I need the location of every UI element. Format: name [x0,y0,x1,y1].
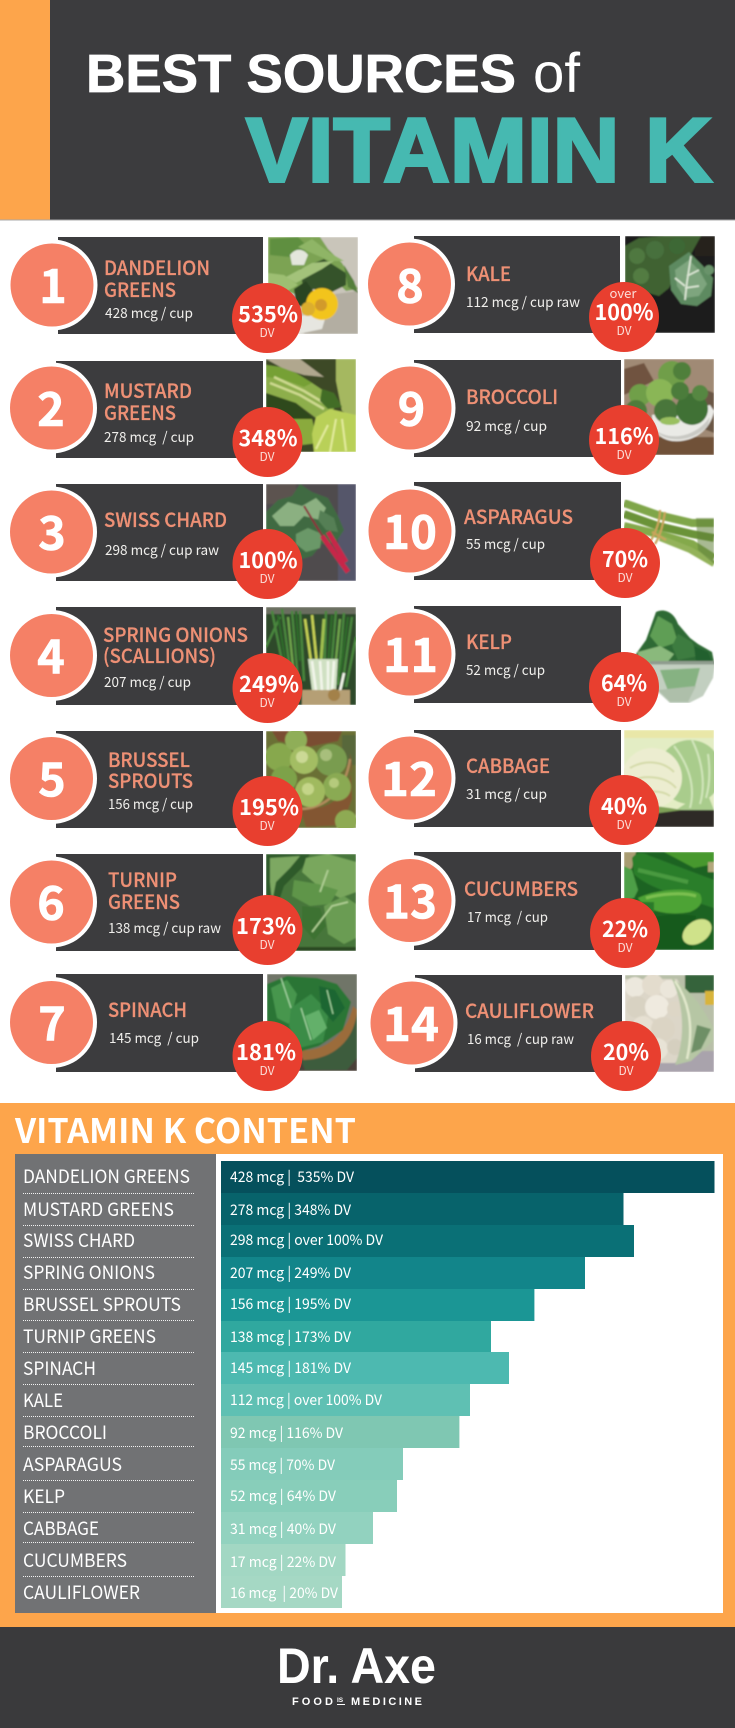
food name and amount: SWISS CHARD [104,504,227,533]
dv badge [589,282,659,352]
dv badge: DV [617,569,633,586]
food label column: ASPARAGUS [23,1451,122,1477]
bar chart: 17 mcg | 22% DV [230,1551,337,1572]
dv badge [589,405,659,475]
photo: cucumbers [624,852,714,950]
photo: spinach [267,974,357,1071]
number 7 [6,977,97,1068]
number 5: 5 [38,742,66,810]
food label column: CABBAGE [23,1515,99,1541]
tagline: MEDICINE [351,1696,422,1708]
dv badge: 348% [238,421,298,453]
number 4: 4 [37,618,65,688]
panel: vitamin k content [0,1103,735,1627]
food name and amount [108,864,221,938]
dv badge: DV [616,693,632,710]
number 1 [6,240,98,330]
food name and amount: 156 mcg / cup [108,794,193,814]
food name and amount: GREENS [104,274,176,303]
food label column: SWISS CHARD [23,1227,135,1253]
dv badge: 100% [594,295,654,327]
photo: asparagus [624,500,714,568]
bar chart: 207 mcg | 249% DV [230,1262,352,1283]
bar chart: 16 mcg | 20% DV [230,1582,339,1603]
dv badge: DV [259,1062,275,1079]
card 6: turnip greens [6,854,356,965]
card 7: spinach [6,974,357,1091]
number 13 [364,855,456,946]
dv badge [232,895,302,965]
food label column: BROCCOLI [23,1419,107,1445]
amount: 92 mcg / cup [466,416,547,436]
photo: swiss chard [266,484,356,581]
dv badge: DV [259,936,275,953]
card 2: mustard greens [6,359,356,477]
card 1: dandelion greens [6,237,358,353]
dv badge: 195% [239,790,299,822]
number 14 [366,978,458,1068]
food name and amount: SPINACH [108,994,187,1023]
card 5: brussel sprouts [6,729,357,846]
food name and amount [103,619,248,692]
card 4: spring onions [6,607,356,723]
bar chart: 92 mcg | 116% DV [230,1422,344,1443]
dv badge: 249% [239,667,299,699]
food name: CUCUMBERS [464,873,578,902]
bar chart: 278 mcg | 348% DV [230,1199,352,1220]
food label column: TURNIP GREENS [23,1323,156,1349]
food label column: BRUSSEL SPROUTS [23,1291,181,1317]
dv badge [232,529,302,599]
number 5 [6,733,97,824]
photo: cauliflower [625,975,714,1072]
number 14: 14 [383,986,439,1055]
dv badge: DV [617,939,633,956]
heading: vitamin k content: VITAMIN K CONTENT [14,1104,356,1153]
number 10 [364,486,456,576]
dv badge: DV [259,817,275,834]
number 7: 7 [38,986,66,1054]
amount: 52 mcg / cup [466,660,545,680]
dv badge [589,775,659,845]
dv badge: over [610,283,637,302]
dv badge: 181% [236,1035,296,1067]
photo: mustard greens [266,359,356,452]
amount: 112 mcg / cup raw [466,292,580,312]
food name and amount: GREENS [104,397,176,426]
amount: 298 mcg / cup raw [105,540,219,560]
bar chart: 428 mcg | 535% DV [230,1166,355,1187]
card 3: swiss chard [6,484,356,599]
dv badge [232,1021,302,1091]
food label column: CAULIFLOWER [23,1579,140,1605]
photo: brussel sprouts [266,731,356,828]
dv badge: 40% [601,789,647,821]
dv badge: DV [616,446,632,463]
logo: dr. axe: Dr. Axe [277,1638,436,1694]
photo: kelp [635,609,714,703]
amount: 145 mcg / cup [109,1028,199,1048]
food name: BROCCOLI [466,381,558,410]
tagline: IS [337,1697,344,1704]
amount: 55 mcg / cup [466,534,545,554]
amount: 17 mcg / cup [467,907,548,927]
card 12: cabbage [364,730,722,845]
food label column [15,1154,216,1613]
food name and amount: DANDELION [104,252,210,281]
dv badge [232,283,302,353]
food label column: CUCUMBERS [23,1547,127,1573]
food name and amount: 207 mcg / cup [104,672,191,692]
number 2 [6,362,97,454]
dv badge: 173% [236,909,296,941]
card 10: asparagus [364,482,714,598]
dv badge [232,653,302,723]
dv badge: 100% [238,543,298,575]
dv badge [232,407,302,477]
dv badge: 116% [594,419,654,451]
number 12: 12 [381,741,437,810]
number 6 [6,856,97,948]
dv badge: DV [616,322,632,339]
food label column: SPINACH [23,1355,96,1381]
food label column: KALE [23,1387,63,1413]
number 2: 2 [37,371,65,440]
food label column: MUSTARD GREENS [23,1196,174,1222]
number 9: 9 [398,371,425,440]
bar chart: 55 mcg | 70% DV [230,1454,336,1475]
food name: ASPARAGUS [464,501,573,530]
footer [0,1627,735,1728]
dv badge: DV [259,694,275,711]
tagline: FOOD [292,1696,333,1708]
header banner [0,0,735,220]
food label column: KELP [23,1483,65,1509]
photo: kale [625,236,715,333]
number 13: 13 [383,864,437,932]
food name and amount: GREENS [108,886,180,915]
dv badge: DV [616,816,632,833]
food name and amount: 138 mcg / cup raw [108,918,221,938]
number 4 [6,610,97,701]
dv badge [232,776,302,846]
photo: cabbage [624,730,714,827]
dv badge: 20% [603,1035,649,1067]
photo: spring onions [266,607,356,705]
number 1: 1 [39,248,67,317]
food name: CABBAGE [466,750,550,779]
number 9 [364,362,456,454]
amount: 16 mcg / cup raw [467,1029,574,1049]
number 8: 8 [396,248,424,317]
food name and amount: 278 mcg / cup [104,427,194,447]
tagline [292,1696,422,1708]
bar chart: 138 mcg | 173% DV [230,1326,352,1347]
food name and amount: SPROUTS [108,765,193,794]
title: best sources of: of [533,41,580,104]
food name and amount: MUSTARD [104,375,192,404]
bar chart: 298 mcg | over 100% DV [230,1229,384,1250]
photo: dandelion greens [268,237,358,334]
food name and amount [108,744,193,814]
dv badge: DV [259,324,275,341]
food name and amount: SPRING ONIONS [103,619,248,648]
dv badge: DV [259,570,275,587]
food name and amount: TURNIP [108,864,177,893]
title: vitamin k: VITAMIN K [246,100,712,202]
food label column: DANDELION GREENS [23,1163,190,1189]
food name and amount [104,375,194,447]
bar chart: 52 mcg | 64% DV [230,1485,337,1506]
dv badge [591,1021,661,1091]
food name and amount: 428 mcg / cup [105,303,193,323]
dv badge [589,652,659,722]
dv badge: 64% [601,666,647,698]
number 8 [364,238,455,330]
photo: turnip greens [266,854,356,951]
bar chart: 156 mcg | 195% DV [230,1293,352,1314]
food name and amount [104,252,210,323]
dv badge: DV [259,448,275,465]
food name: KALE [466,258,511,287]
food label column: SPRING ONIONS [23,1259,155,1285]
number 11 [364,608,456,700]
food name: KELP [466,626,512,655]
number 12 [364,732,456,824]
food name: CAULIFLOWER [465,995,594,1024]
dv badge [590,898,660,968]
chart background [15,1154,723,1613]
amount: 31 mcg / cup [466,784,547,804]
bar chart: 145 mcg | 181% DV [230,1357,352,1378]
bar chart [221,1161,714,1608]
number 6: 6 [37,865,65,934]
dv badge: 22% [602,912,648,944]
food name and amount: (SCALLIONS) [103,640,216,669]
card 13: cucumbers [364,852,716,968]
card 8: kale [364,236,715,352]
food name and amount: BRUSSEL [108,744,190,773]
bar chart: 112 mcg | over 100% DV [230,1389,383,1410]
bar chart: 31 mcg | 40% DV [230,1518,337,1539]
card 14: cauliflower [366,974,714,1091]
card 11: kelp [364,606,715,722]
number 10: 10 [383,494,437,563]
title: best sources of: BEST SOURCES [86,44,516,104]
dv badge: 70% [602,542,648,574]
number 3 [6,486,97,578]
dv badge: DV [618,1062,634,1079]
dv badge [590,528,660,598]
card 9: broccoli [364,359,714,475]
dv badge: 535% [238,297,298,329]
number 11: 11 [383,617,438,686]
photo: broccoli [624,359,714,455]
number 3: 3 [38,495,66,564]
